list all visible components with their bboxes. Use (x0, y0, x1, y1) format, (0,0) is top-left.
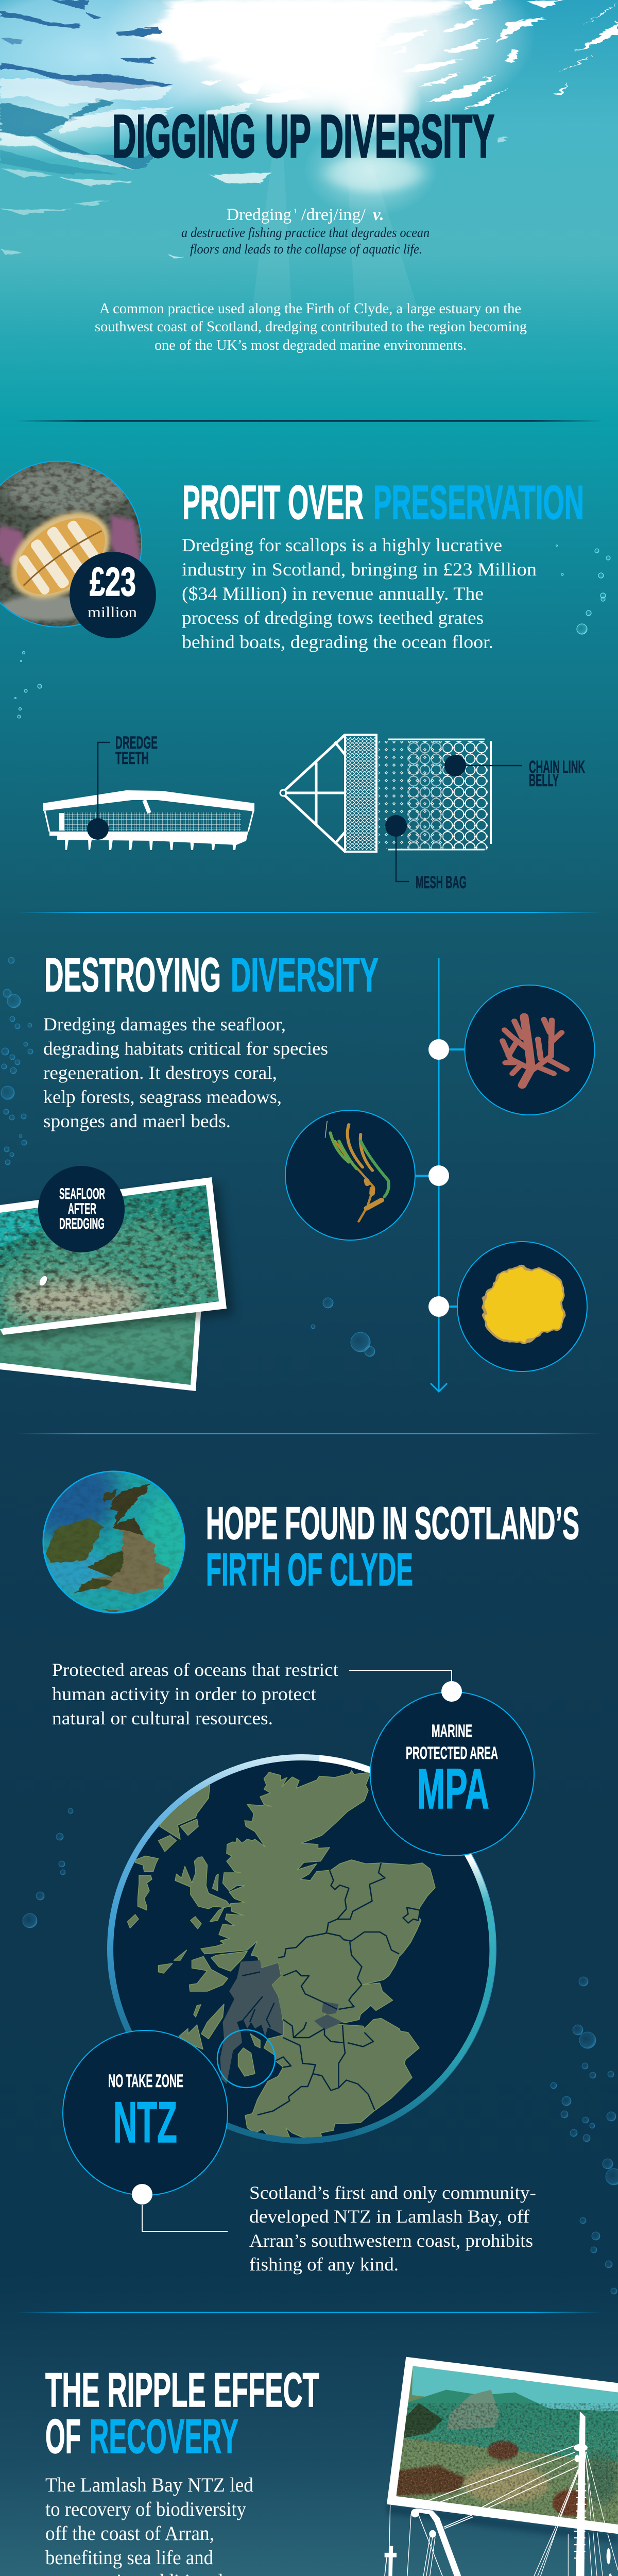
body text: The Lamlash Bay NTZ led (45, 2474, 253, 2496)
icon: coral circle (465, 985, 594, 1115)
boom and blocks (416, 2509, 493, 2576)
label: mesh bag (385, 815, 467, 892)
body text: sponges and maerl beds. (43, 1111, 231, 1131)
definition of dredging: a destructive fishing practice that degrades ocean (181, 225, 430, 240)
callout: NTZ: NO TAKE ZONE (108, 2071, 183, 2091)
photo: seafloor back (0, 1312, 201, 1391)
text: scotland's first NTZ: Scotland’s first and only community- (249, 2182, 536, 2203)
globe photo (15, 1448, 196, 1618)
label: mesh bag: MESH BAG (416, 873, 467, 892)
callout: MPA (370, 1681, 534, 1856)
label: dredge teeth: DREDGE (115, 733, 158, 753)
heading: PROFIT OVER (182, 476, 364, 529)
body text (43, 1014, 328, 1131)
text: scotland's first NTZ: developed NTZ in Lamlash Bay, off (249, 2206, 529, 2227)
definition of dredging: v. (373, 206, 384, 224)
body text: to recovery of biodiversity (45, 2498, 246, 2520)
intro paragraph (95, 301, 527, 353)
heading: THE RIPPLE EFFECT (45, 2363, 319, 2417)
text: protected areas: human activity in order to protect (52, 1684, 316, 1704)
illustration: fishing boat (360, 2411, 618, 2576)
callout: NTZ (63, 2030, 228, 2205)
text: protected areas: Protected areas of oceans that restrict (52, 1659, 338, 1680)
bubbles: destroying section (1, 957, 375, 1357)
heading: FIRTH OF CLYDE (206, 1544, 413, 1595)
icon: kelp circle (285, 1110, 415, 1240)
body text: Dredging damages the seafloor, (43, 1014, 286, 1035)
arrow timeline (415, 958, 465, 1392)
text: scotland's first NTZ: fishing of any kind. (249, 2254, 399, 2275)
heading (45, 2363, 319, 2463)
body text (182, 535, 537, 652)
label: dredge teeth (87, 733, 158, 840)
bubbles: map section (23, 1808, 618, 2294)
main mast (575, 2411, 586, 2576)
islands (160, 1785, 210, 1839)
photo: recovered seabed (387, 2357, 618, 2544)
text: scotland's first NTZ (249, 2182, 536, 2275)
callout: NTZ: NTZ (113, 2090, 177, 2155)
callout: seafloor after dredging (38, 1166, 125, 1252)
body text (44, 2474, 253, 2576)
fore mast (387, 2546, 393, 2576)
body text: benefiting sea life and (45, 2547, 213, 2569)
heading: OF (45, 2409, 81, 2463)
icon: sponge circle (457, 1242, 587, 1371)
text: scotland's first NTZ: Arran’s southwestern coast, prohibits (249, 2230, 533, 2251)
definition of dredging (181, 206, 430, 257)
council borders (258, 1863, 420, 2115)
body text: industry in Scotland, bringing in £23 Million (182, 559, 537, 580)
body text: Dredging for scallops is a highly lucrative (182, 535, 502, 555)
heading (206, 1497, 579, 1595)
diagram: dredge side view (43, 733, 254, 850)
intro paragraph: southwest coast of Scotland, dredging contributed to the region becoming (95, 319, 527, 335)
mainland (201, 1770, 435, 2138)
text: protected areas: natural or cultural resources. (52, 1708, 273, 1728)
callout: MPA: MPA (417, 1757, 489, 1821)
diagram: dredge top view (280, 735, 585, 892)
callout: seafloor after dredging: SEAFLOOR (59, 1185, 105, 1202)
panel: profit over preservation (0, 459, 585, 892)
intro paragraph: A common practice used along the Firth of Clyde, a large estuary on the (99, 301, 521, 317)
body text: regeneration. It destroys coral, (43, 1062, 277, 1083)
label: dredge teeth: TEETH (115, 749, 149, 768)
panel: hope found in scotland (15, 1448, 579, 2275)
body text: off the coast of Arran, (45, 2522, 214, 2545)
scallop photo circle (0, 459, 144, 634)
body text: degrading habitats critical for species (43, 1038, 328, 1059)
text: protected areas (52, 1659, 338, 1728)
connector: NTZ (142, 2205, 228, 2231)
callout: MPA: MARINE (432, 1721, 472, 1741)
intro paragraph: one of the UK’s most degraded marine environments. (154, 337, 467, 353)
bubbles: profit section (14, 545, 610, 718)
connector: MPA (349, 1670, 452, 1682)
body text: process of dredging tows teethed grates (182, 607, 484, 628)
header water surface photo (0, 0, 618, 421)
callout: seafloor after dredging: AFTER (68, 1200, 96, 1217)
definition of dredging: /drej/ing/ (301, 206, 366, 224)
label: chain link belly (444, 755, 585, 790)
heading: DIVERSITY (231, 948, 379, 1002)
NTZ focus ring (217, 2030, 275, 2088)
timeline dots (428, 1039, 449, 1317)
body text: kelp forests, seagrass meadows, (43, 1087, 282, 1107)
callout: £23 million: £23 (90, 559, 136, 604)
callout: £23 million: million (88, 604, 137, 621)
label: chain link belly: BELLY (529, 771, 559, 790)
heading: DESTROYING (44, 948, 221, 1002)
callout: MPA: PROTECTED AREA (406, 1743, 498, 1763)
definition of dredging: Dredging (227, 206, 291, 224)
body text: ($34 Million) in revenue annually. The (182, 583, 484, 604)
map of scotland (110, 1757, 493, 2141)
definition of dredging: floors and leads to the collapse of aquatic life. (190, 242, 422, 257)
argyll shaded (220, 1960, 283, 2084)
callout: £23 million (70, 552, 156, 638)
photo: seafloor front (0, 1177, 234, 1341)
panel: destroying diversity (0, 948, 594, 1396)
callout: seafloor after dredging: DREDGING (59, 1215, 105, 1232)
panel: the ripple effect of recovery (44, 2357, 618, 2576)
heading: RECOVERY (90, 2409, 238, 2463)
body text: behind boats, degrading the ocean floor. (182, 632, 493, 652)
definition of dredging: 1 (294, 208, 297, 215)
